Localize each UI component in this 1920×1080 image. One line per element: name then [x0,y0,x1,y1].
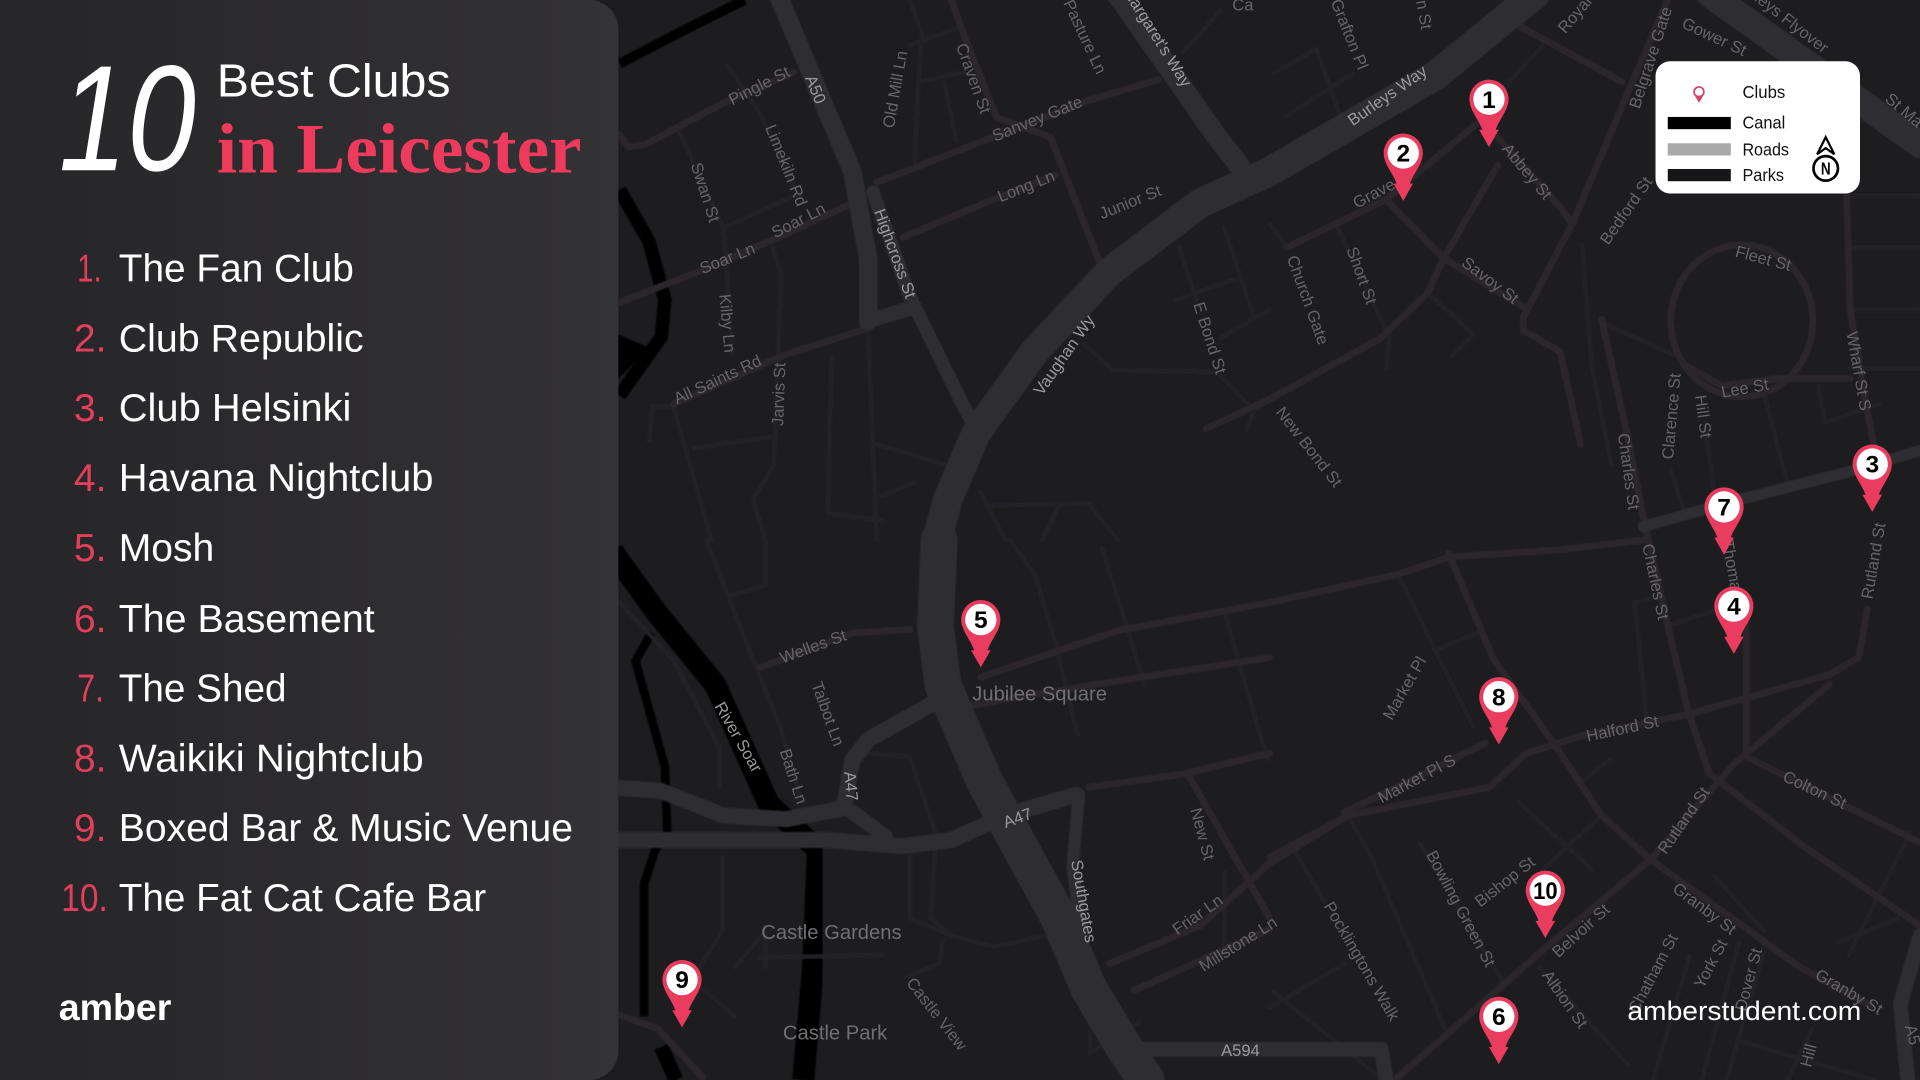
website url: amberstudent.com [1627,996,1861,1026]
street labels: Halford St [1585,712,1661,745]
street labels: Hill St [1691,394,1716,439]
club list: The Shed [119,668,287,711]
street labels [671,0,1920,1069]
legend label: parks: Parks [1742,165,1784,185]
street labels: Chatham St [1624,930,1682,1016]
street labels: A594 [1221,1041,1260,1060]
street labels: Vaughan Wy [1030,311,1099,399]
swatch: canal [1668,117,1731,129]
street labels: Sanvey Gate [989,92,1085,145]
swatch: roads [1668,143,1731,156]
club list: Boxed Bar & Music Venue [119,807,573,850]
logo: amber: amber [59,987,171,1028]
street labels: Hill [1796,1042,1821,1069]
map pins [662,80,1892,1064]
street labels: Welles St [777,626,849,667]
club list: 1. [77,248,102,291]
street labels: Belgrave Gate [1625,4,1676,111]
club list [61,248,573,920]
street labels: Albion St [1538,967,1592,1032]
club list: Club Republic [119,317,364,360]
street labels: Soar Ln [768,199,828,242]
street labels: All Saints Rd [671,351,764,408]
street labels: Bedford St [1596,173,1657,248]
icon: north arrow [1813,137,1838,181]
pin 3 [1853,444,1892,512]
title: in Leicester: in Leicester [217,111,582,189]
canal and river [600,0,818,1080]
street labels: Dover St [1731,946,1766,1013]
street labels: Pingle St [725,62,793,109]
icon: north arrow: N [1821,158,1831,178]
club list: 5. [74,527,107,570]
street labels: Charles St [1614,432,1643,511]
street labels: Charles St [1638,542,1673,622]
club list: 4. [74,457,107,500]
pin 4 [1714,587,1753,654]
map background [618,0,1920,1080]
club list: 2. [74,317,107,360]
street labels: Church Gate [1283,253,1333,347]
legend label: clubs: Clubs [1742,82,1785,102]
club list: 10. [61,877,108,920]
pin 5 [961,600,1000,667]
street labels: E Bond St [1189,300,1230,377]
club list: Mosh [119,527,214,570]
club list: Waikiki Nightclub [119,737,424,780]
legend label: roads: Roads [1742,140,1789,160]
street labels: Savoy St [1458,253,1523,308]
street labels: Bath Ln [776,746,811,806]
club list: The Basement [119,598,375,641]
street labels: Kilby Ln [715,293,739,353]
street labels: Millstone Ln [1196,913,1280,975]
street labels: Wharf St S [1842,330,1875,412]
pin 4: 4 [1727,594,1741,621]
street labels: Soar Ln [697,239,758,278]
pin 1 [1469,80,1509,147]
street labels: Colton St [1780,767,1850,813]
street labels: Jarvis St [768,362,789,426]
legend [1656,61,1860,193]
pin 10: 10 [1533,878,1558,905]
street labels: Thomas [1718,538,1747,600]
street labels: Market Pl [1379,653,1430,723]
club list: 7. [77,668,104,711]
pin 9 [662,960,702,1027]
street labels: Gower St [1679,14,1750,60]
circular road [1671,245,1813,397]
street labels: Castle View [902,974,971,1054]
main roads [612,0,1920,1080]
street labels: Craven St [952,41,995,117]
club list: Havana Nightclub [119,457,433,500]
street labels: Highcross St [870,206,920,301]
legend label: canal: Canal [1742,113,1785,133]
icon: club pin [1694,87,1704,103]
pin 10 [1526,871,1565,938]
club list: 3. [74,387,107,430]
title number 10: 10 [59,34,196,202]
street labels: Jubilee Square [972,683,1107,705]
pin 8 [1479,677,1518,744]
title: Best Clubs: Best Clubs [217,55,451,107]
pin 7 [1704,487,1744,555]
street labels: A47 [840,771,862,802]
street labels: Belvoir St [1548,900,1614,961]
street labels: York St [1690,936,1732,991]
street labels: New Bond St [1272,403,1346,491]
panel: club list sidebar [0,0,618,1080]
swatch: parks [1668,169,1731,181]
street labels: A50 [801,72,830,107]
street labels: Old Mill Ln [879,49,911,129]
street labels: Fleet St [1733,242,1794,275]
pin 2 [1384,133,1423,201]
street labels: Burleys Way [1344,61,1431,130]
pin 7: 7 [1717,495,1731,522]
pin 8: 8 [1492,684,1506,711]
street labels: Granby St [1669,879,1740,939]
street labels: Junior St [1096,181,1164,223]
club list: The Fan Club [119,248,354,291]
street labels: Castle Gardens [761,922,902,944]
street labels: Granby St [1812,965,1886,1019]
street labels: Rutland St [1654,783,1714,857]
pin 5: 5 [974,607,988,634]
street labels: Short St [1343,244,1381,307]
club list: 6. [74,598,107,641]
pin 2: 2 [1396,141,1410,168]
pin 6: 6 [1492,1004,1506,1031]
street labels: Castle Park [783,1022,888,1044]
street labels: Lee St [1720,375,1770,402]
club list: 9. [74,807,107,850]
street labels: Friar Ln [1169,891,1226,939]
street labels: Market Pl S [1375,750,1459,807]
street labels: New St [1186,806,1219,862]
street labels: Limekiln Rd [761,122,811,209]
street labels: Southgates [1067,858,1100,944]
street labels: Clarence St [1658,372,1685,460]
street labels: Swan St [687,160,724,225]
pin 3: 3 [1865,452,1879,479]
club list: Club Helsinki [119,387,351,430]
pin 9: 9 [675,967,689,994]
street labels: Pocklingtons Walk [1320,898,1404,1025]
street labels: Bishop St [1471,852,1539,911]
street labels: Long Ln [995,166,1057,206]
street labels: A47 [1000,804,1035,832]
street labels: Rutland St [1857,521,1890,600]
club list: The Fat Cat Cafe Bar [119,877,486,920]
minor streets [620,0,1920,1080]
street labels: River Soar [711,699,766,776]
street labels: Grave [1350,175,1398,212]
street labels: Bowling Green St [1422,847,1500,970]
club list: 8. [74,737,107,780]
pin 1: 1 [1482,87,1496,114]
pin 6 [1479,997,1518,1064]
street labels: Talbot Ln [807,679,848,749]
street labels: Abbey St [1498,140,1556,204]
secondary streets [620,0,1920,1080]
